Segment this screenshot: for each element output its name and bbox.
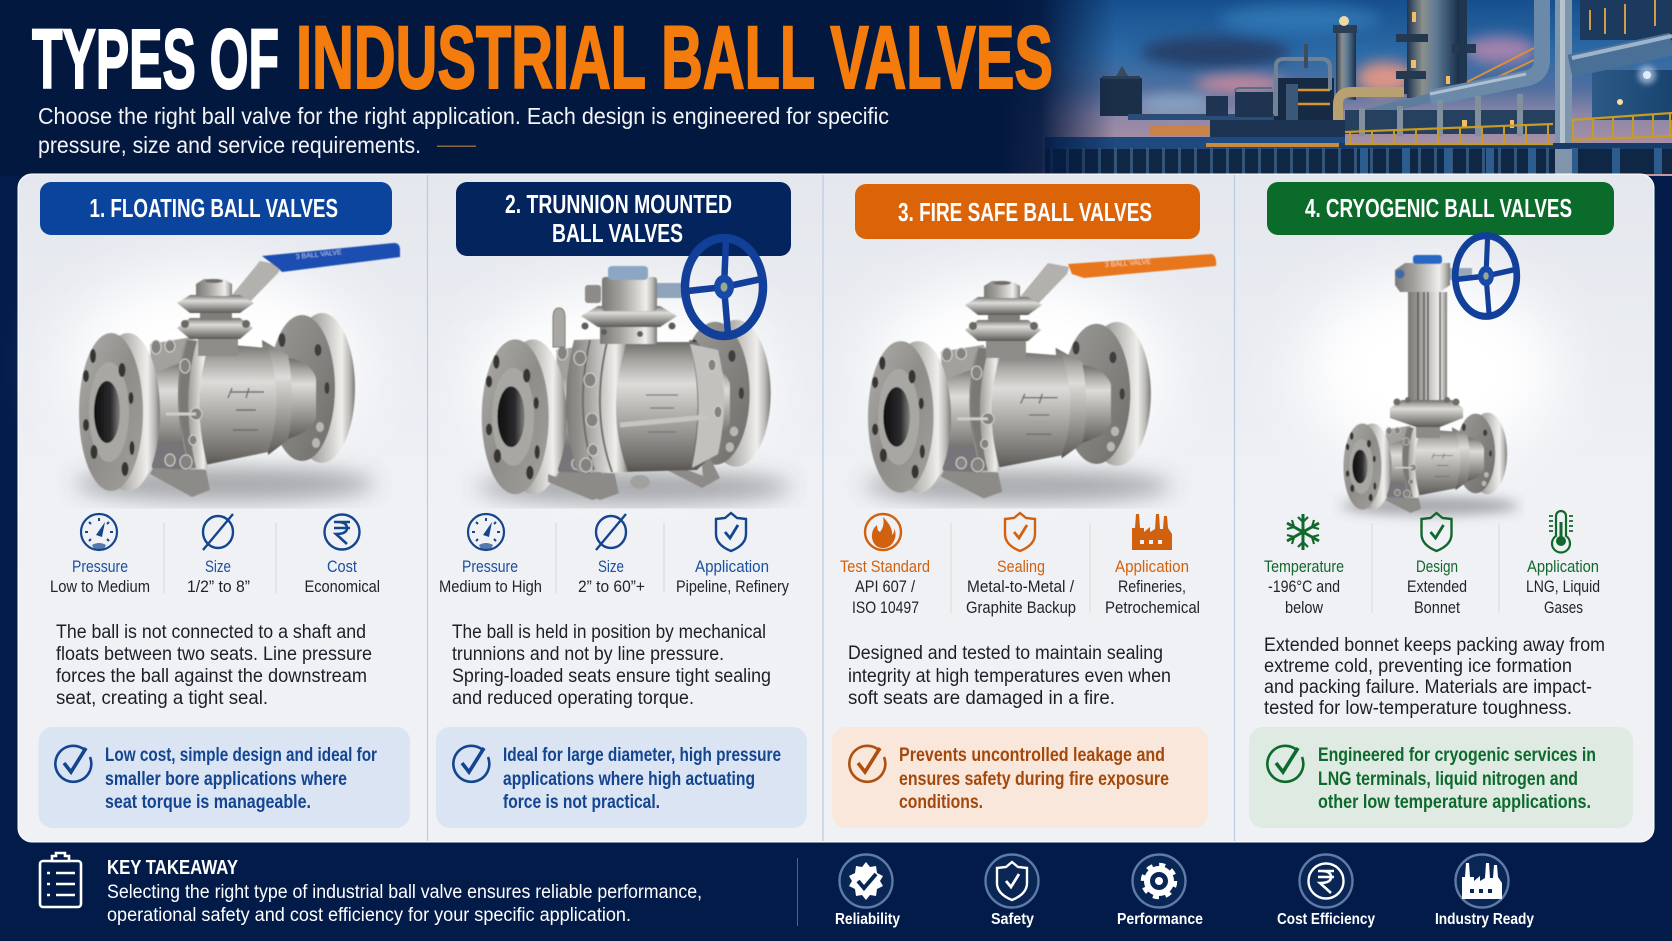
callout: Engineered for cryogenic services in — [1318, 745, 1596, 766]
spec: pressure — [50, 514, 150, 596]
illustration: fire safe valve with orange lever — [864, 254, 1216, 502]
icon: cost efficiency — [1277, 854, 1375, 928]
main white panel — [18, 174, 1654, 842]
spec: test standard — [840, 514, 930, 617]
panel: fire safe ball valves — [832, 184, 1216, 828]
icon: performance: Performance — [1117, 911, 1203, 928]
icon: reliability — [835, 854, 900, 928]
description: floats between two seats. Line pressure — [56, 644, 372, 665]
footer: key takeaway — [40, 853, 1534, 928]
header: trunnion — [456, 182, 791, 256]
icon: reliability: Reliability — [835, 911, 900, 928]
header: fire safe: 3. FIRE SAFE BALL VALVES — [898, 197, 1152, 227]
spec: size — [578, 514, 645, 596]
icon: handwheel on cryogenic valve — [1455, 236, 1517, 316]
icon: cost efficiency: Cost Efficiency — [1277, 911, 1375, 928]
spec: sealing: Graphite Backup — [966, 598, 1076, 617]
callout: other low temperature applications. — [1318, 792, 1591, 813]
title: INDUSTRIAL BALL VALVES — [296, 7, 1053, 107]
illustration: cryogenic valve with extended bonnet — [1341, 255, 1519, 515]
description — [1264, 635, 1605, 719]
callout: Prevents uncontrolled leakage and — [899, 745, 1165, 766]
header: trunnion: BALL VALVES — [552, 218, 683, 248]
description: Extended bonnet keeps packing away from — [1264, 635, 1605, 656]
description: The ball is held in position by mechanical — [452, 622, 766, 643]
spec: cost — [304, 514, 380, 596]
subtitle: pressure, size and service requirements. — [38, 132, 421, 158]
takeaway text — [107, 857, 702, 926]
spec: sealing — [966, 513, 1076, 617]
description: The ball is not connected to a shaft and — [56, 622, 366, 643]
spec: application: Application — [1527, 557, 1599, 576]
spec: application — [676, 513, 789, 596]
subtitle: Choose the right ball valve for the right application. Each design is engineered for specific — [38, 103, 889, 129]
description — [56, 622, 372, 709]
spec: pressure — [439, 514, 542, 596]
panel: floating ball valves — [38, 182, 410, 828]
spec: sealing: Metal-to-Metal / — [967, 577, 1074, 596]
icon: handwheel on trunnion valve — [685, 238, 763, 336]
icon: safety: Safety — [991, 911, 1034, 928]
description: Designed and tested to maintain sealing — [848, 643, 1163, 664]
callout — [38, 727, 410, 828]
spec: test standard: ISO 10497 — [852, 598, 919, 617]
callout: Ideal for large diameter, high pressure — [503, 745, 781, 766]
spec: application: Application — [1115, 557, 1189, 576]
callout: Low cost, simple design and ideal for — [105, 745, 377, 766]
icon: clipboard — [40, 853, 81, 907]
callout: seat torque is manageable. — [105, 792, 311, 813]
header photo: refinery at dusk — [985, 0, 1672, 176]
spec: cost: Economical — [304, 577, 380, 596]
icon: performance — [1117, 854, 1203, 928]
illustration: fire safe valve with orange lever: 3 BALL VALVE — [1105, 259, 1152, 269]
spec: pressure: Pressure — [72, 557, 128, 576]
illustration: trunnion valve with handwheel — [478, 266, 792, 504]
spec: application: Pipeline, Refinery — [676, 577, 789, 596]
spec: pressure: Pressure — [462, 557, 518, 576]
spec: size: Size — [205, 557, 231, 576]
description: soft seats are damaged in a fire. — [848, 688, 1115, 709]
description — [452, 622, 771, 709]
subtitle — [38, 103, 889, 158]
panel: trunnion mounted ball valves — [436, 182, 807, 828]
takeaway text: Selecting the right type of industrial ball valve ensures reliable performance, — [107, 882, 702, 903]
callout: smaller bore applications where — [105, 769, 347, 790]
description: forces the ball against the downstream — [56, 666, 367, 687]
spec: application: Gases — [1544, 598, 1583, 617]
spec: test standard: API 607 / — [855, 577, 915, 596]
spec: temperature — [1264, 514, 1344, 617]
spec: design — [1407, 513, 1467, 617]
spec: size — [187, 514, 250, 596]
spec: application: Petrochemical — [1105, 598, 1200, 617]
spec: application: LNG, Liquid — [1526, 577, 1600, 596]
spec: temperature: Temperature — [1264, 557, 1344, 576]
illustration: floating ball valve with blue lever — [75, 243, 400, 501]
header: cryogenic — [1267, 182, 1614, 235]
spec: pressure: Low to Medium — [50, 577, 150, 596]
spec: size: Size — [598, 557, 624, 576]
description: trunnions and not by line pressure. — [452, 644, 724, 665]
title: TYPES OF — [32, 12, 279, 106]
description: Spring-loaded seats ensure tight sealing — [452, 666, 771, 687]
callout: applications where high actuating — [503, 769, 755, 790]
illustration: floating ball valve with blue lever: 3 BALL VALVE — [295, 249, 342, 261]
icon: industry ready — [1435, 854, 1534, 928]
description: seat, creating a tight seal. — [56, 688, 268, 709]
spec: size: 2” to 60”+ — [578, 577, 645, 596]
spec: design: Bonnet — [1414, 598, 1460, 617]
spec: temperature: below — [1285, 598, 1324, 617]
spec: pressure: Medium to High — [439, 577, 542, 596]
spec: design: Design — [1416, 557, 1458, 576]
spec: application: Refineries, — [1118, 577, 1186, 596]
header: floating: 1. FLOATING BALL VALVES — [90, 193, 338, 223]
description: and reduced operating torque. — [452, 688, 694, 709]
header: fire safe — [855, 184, 1200, 239]
spec: temperature: -196°C and — [1268, 577, 1340, 596]
description: extreme cold, preventing ice formation — [1264, 656, 1572, 677]
callout: LNG terminals, liquid nitrogen and — [1318, 769, 1578, 790]
icon: safety — [986, 854, 1038, 928]
description: tested for low-temperature toughness. — [1264, 698, 1572, 719]
callout: force is not practical. — [503, 792, 660, 813]
header: floating — [40, 182, 392, 235]
callout: conditions. — [899, 792, 983, 813]
callout — [1249, 727, 1633, 828]
takeaway text: KEY TAKEAWAY — [107, 857, 239, 879]
description: and packing failure. Materials are impact- — [1264, 677, 1592, 698]
title — [32, 7, 1053, 107]
takeaway text: operational safety and cost efficiency for your specific application. — [107, 905, 631, 926]
spec: design: Extended — [1407, 577, 1467, 596]
description — [848, 643, 1171, 709]
spec: cost: Cost — [327, 557, 357, 576]
spec: size: 1/2” to 8” — [187, 577, 250, 596]
spec: test standard: Test Standard — [840, 557, 930, 576]
callout — [832, 727, 1208, 828]
icon: industry ready: Industry Ready — [1435, 911, 1534, 928]
header: cryogenic: 4. CRYOGENIC BALL VALVES — [1305, 193, 1572, 223]
header: trunnion: 2. TRUNNION MOUNTED — [505, 189, 732, 219]
spec: application — [1526, 511, 1600, 617]
description: integrity at high temperatures even when — [848, 666, 1171, 687]
panel: cryogenic ball valves — [1249, 182, 1633, 828]
callout: ensures safety during fire exposure — [899, 769, 1169, 790]
spec: application — [1105, 514, 1200, 617]
spec: application: Application — [695, 557, 769, 576]
callout — [436, 727, 807, 828]
spec: sealing: Sealing — [997, 557, 1045, 576]
